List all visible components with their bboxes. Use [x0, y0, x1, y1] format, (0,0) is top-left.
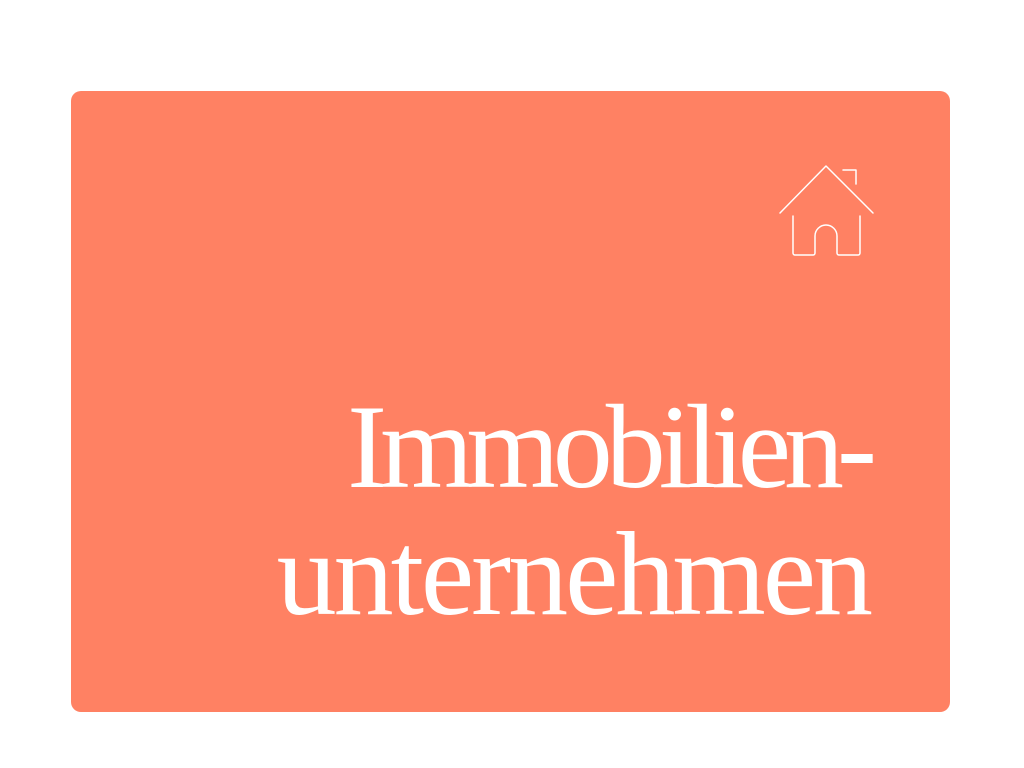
title line 1: Immobilien- [347, 380, 870, 513]
icon: house [779, 165, 874, 256]
panel: card [71, 91, 950, 712]
title: Immobilienunternehmen [277, 380, 873, 640]
title line 2: unternehmen [277, 507, 870, 640]
